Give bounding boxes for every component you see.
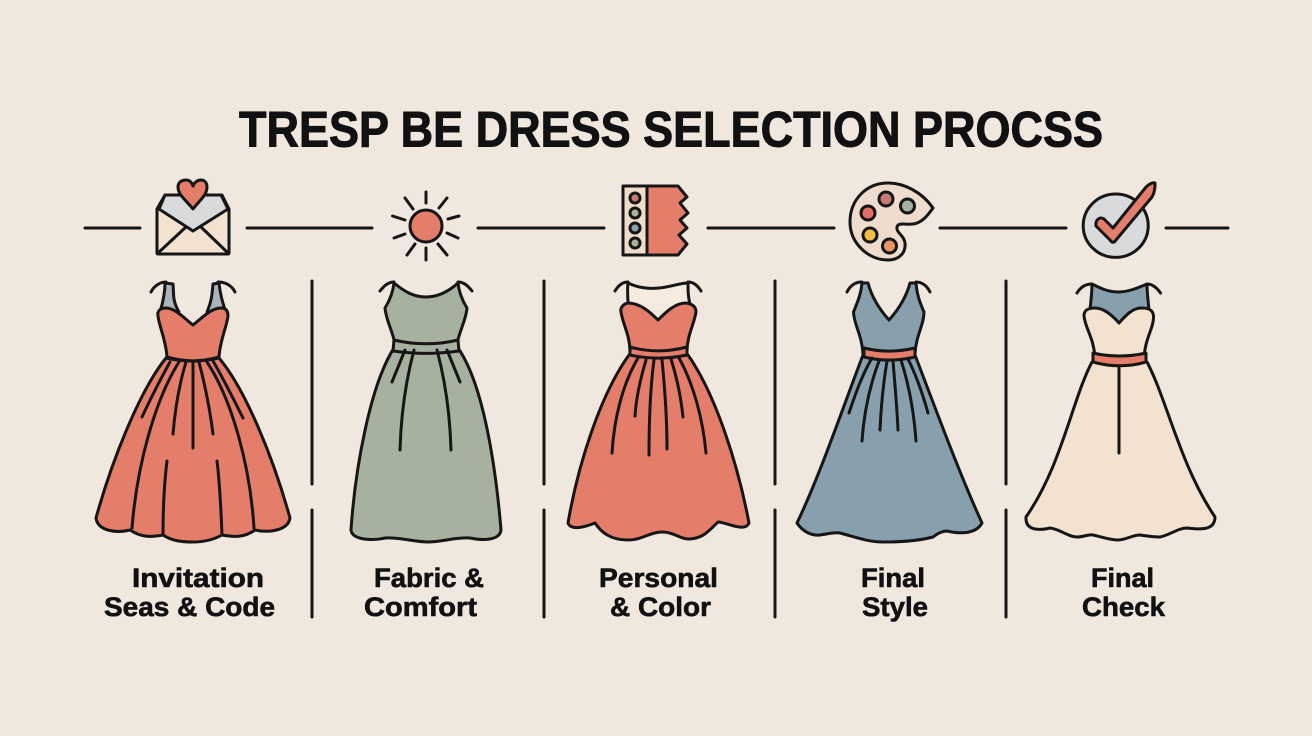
icon: paint palette bbox=[850, 183, 933, 260]
label: Fabric & Comfort bbox=[364, 563, 484, 622]
label: Final Style: Final bbox=[861, 563, 925, 593]
label: Final Style: Style bbox=[862, 592, 928, 622]
label: Personal & Color: & Color bbox=[610, 592, 712, 622]
label: Personal & Color: Personal bbox=[599, 563, 718, 593]
dress 1: coral gown bbox=[96, 282, 290, 542]
label: Final Style bbox=[861, 563, 928, 622]
timeline connector bbox=[85, 226, 1228, 230]
label: Fabric & Comfort: Comfort bbox=[364, 592, 477, 622]
dress 3: coral gown with sheer neck bbox=[568, 282, 749, 540]
label: Final Check: Check bbox=[1082, 592, 1166, 622]
dress 4: blue gown with coral belt bbox=[797, 282, 982, 542]
column dividers bbox=[312, 281, 1006, 617]
icon: sun bbox=[392, 192, 459, 260]
dress 5: cream gown with blue yoke bbox=[1026, 284, 1215, 540]
icon: check mark badge bbox=[1083, 183, 1155, 257]
label: Final Check bbox=[1082, 563, 1166, 622]
label: Invitation Seas & Code bbox=[104, 563, 275, 622]
icon: fabric swatch card bbox=[623, 186, 688, 255]
dress 2: sage gown bbox=[351, 282, 501, 542]
label: Invitation Seas & Code: Seas & Code bbox=[104, 592, 275, 622]
label: Invitation Seas & Code: Invitation bbox=[132, 563, 264, 593]
label: Final Check: Final bbox=[1091, 563, 1154, 593]
label: Personal & Color bbox=[599, 563, 718, 622]
icon: envelope with heart bbox=[157, 180, 229, 254]
title: TRESP BE DRESS SELECTION PROCSS bbox=[239, 102, 1103, 158]
label: Fabric & Comfort: Fabric & bbox=[374, 563, 484, 593]
